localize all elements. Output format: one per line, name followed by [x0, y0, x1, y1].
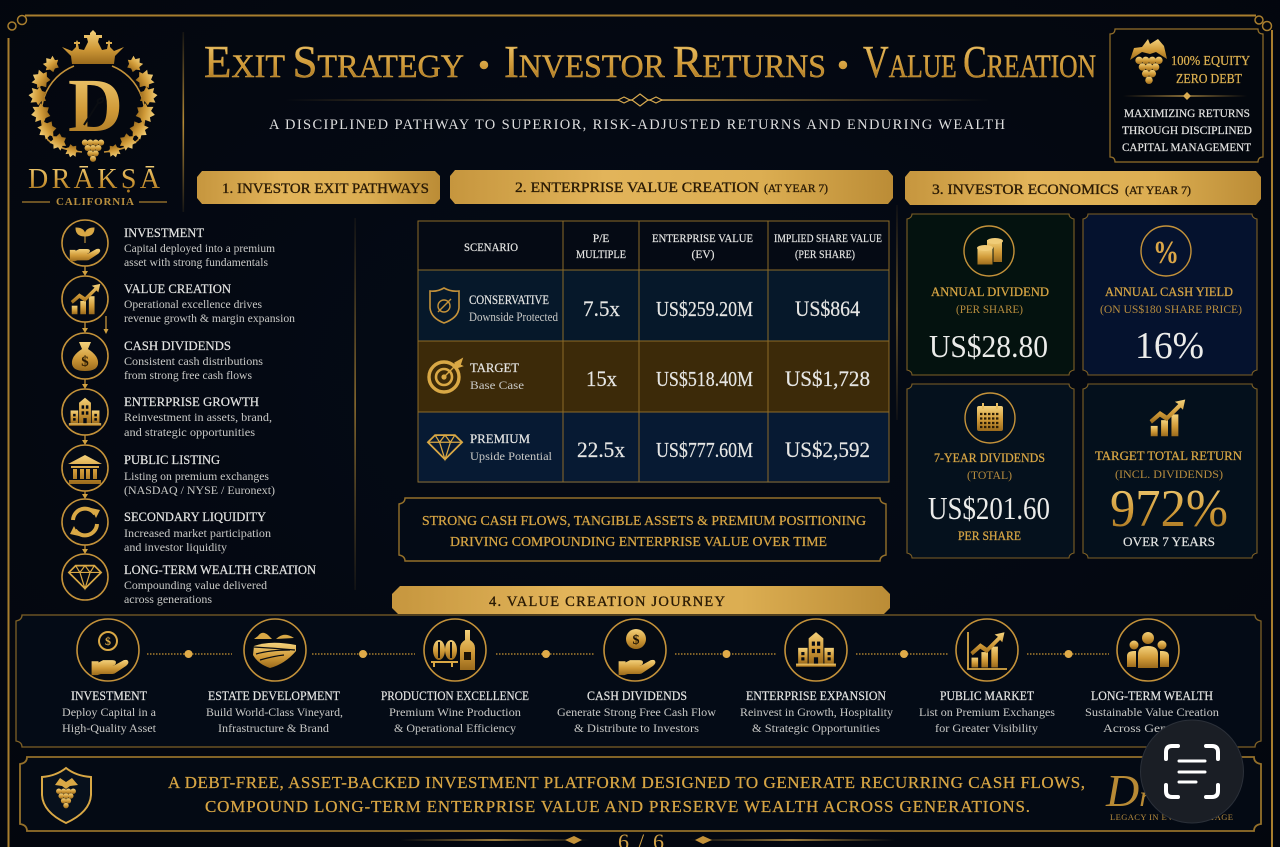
- pathway: secondary liquidity: SECONDARY LIQUIDITY: [124, 509, 267, 524]
- title: VALUE CREATION: [863, 36, 1096, 87]
- panel: annual dividend: ANNUAL DIVIDEND: [931, 284, 1049, 299]
- section banner 1: 1. INVESTOR EXIT PATHWAYS: [222, 181, 429, 197]
- callout: strong cash flows: DRIVING COMPOUNDING ENTERPRISE VALUE OVER TIME: [450, 534, 827, 549]
- pathway: public listing: (NASDAQ / NYSE / Euronext): [124, 485, 275, 497]
- step: cash dividends: CASH DIVIDENDS: [587, 688, 687, 703]
- step: long-term wealth: Sustainable Value Creation: [1085, 705, 1219, 719]
- step: enterprise expansion: [740, 619, 893, 735]
- pathway: enterprise growth: ENTERPRISE GROWTH: [124, 394, 259, 409]
- row: target: TARGET: [470, 361, 519, 375]
- pathway: cash dividends: from strong free cash flows: [124, 370, 253, 382]
- section banner 2: [450, 170, 893, 204]
- panel: target total return: TARGET TOTAL RETURN: [1095, 448, 1243, 463]
- section banner 3: [905, 171, 1261, 205]
- title: EXIT STRATEGY: [204, 36, 464, 87]
- pathway: long-term wealth creation: Compounding value delivered: [124, 580, 267, 592]
- section banner 2: (AT YEAR 7): [764, 181, 828, 195]
- panel: target total return: OVER 7 YEARS: [1123, 535, 1215, 549]
- table header: (EV): [692, 249, 715, 261]
- panel: 7-year dividends: [907, 384, 1074, 558]
- step: production excellence: Premium Wine Production: [389, 705, 521, 719]
- table header: SCENARIO: [464, 242, 518, 254]
- row: conservative: Downside Protected: [469, 310, 559, 324]
- pathway: public listing: PUBLIC LISTING: [124, 452, 220, 467]
- icon: calendar: [965, 393, 1015, 443]
- scan button overlay: [1140, 720, 1244, 823]
- step: long-term wealth: [1085, 619, 1219, 735]
- panel: annual dividend: (PER SHARE): [956, 302, 1023, 316]
- panel: annual dividend: [907, 214, 1074, 375]
- callout: strong cash flows: STRONG CASH FLOWS, TANGIBLE ASSETS & PREMIUM POSITIONING: [422, 513, 866, 528]
- panel: closing statement: [20, 757, 1261, 831]
- pathway: value creation: Operational excellence drives: [124, 299, 263, 311]
- row: conservative: US$259.20M: [656, 297, 753, 321]
- pathway: long-term wealth creation: [62, 554, 317, 606]
- row: premium: US$2,592: [785, 437, 870, 462]
- row: premium: US$777.60M: [656, 438, 753, 462]
- panel: value creation journey: [16, 615, 1261, 747]
- pathway: cash dividends: Consistent cash distributions: [124, 356, 264, 368]
- panel: enterprise value table: [418, 221, 889, 483]
- step: investment: $: [105, 634, 111, 648]
- row: conservative: CONSERVATIVE: [469, 293, 549, 307]
- statement text: A DEBT-FREE, ASSET-BACKED INVESTMENT PLATFORM DESIGNED TO GENERATE RECURRING CASH FLOWS,: [168, 773, 1085, 792]
- icon: scan brackets: [1166, 746, 1218, 797]
- monogram letter D: D: [68, 64, 123, 148]
- step: investment: High-Quality Asset: [62, 721, 157, 735]
- row: premium: Upside Potential: [470, 449, 553, 463]
- pathway: value creation: VALUE CREATION: [124, 281, 232, 296]
- row: premium: [428, 432, 870, 463]
- pathway: investment: asset with strong fundamentals: [124, 257, 269, 269]
- badge headline: 100% EQUITY: [1171, 54, 1250, 69]
- panel: annual cash yield: [1083, 214, 1257, 375]
- step: cash dividends: & Distribute to Investors: [574, 721, 699, 735]
- step: cash dividends: $: [632, 633, 640, 648]
- pathway: public listing: Listing on premium exchanges: [124, 471, 270, 483]
- pathway: long-term wealth creation: LONG-TERM WEALTH CREATION: [124, 562, 317, 577]
- row: target: Base Case: [470, 378, 524, 392]
- pathway: long-term wealth creation: across generations: [124, 594, 213, 606]
- brand name: DRĀKṢĀ: [28, 164, 161, 195]
- step: production excellence: & Operational Efficiency: [394, 721, 516, 735]
- panel: 7-year dividends: US$201.60: [928, 490, 1050, 526]
- row: target: US$518.40M: [656, 367, 753, 391]
- panel: annual cash yield: 16%: [1135, 325, 1204, 367]
- pathway: cash dividends: [62, 333, 264, 382]
- table header: P/E: [593, 233, 609, 245]
- step: investment: [62, 619, 157, 735]
- row: conservative: 7.5x: [583, 296, 620, 321]
- step: estate development: ESTATE DEVELOPMENT: [208, 688, 340, 703]
- badge: 100% equity zero debt: THROUGH DISCIPLINED: [1122, 123, 1252, 137]
- pathway: investment: [62, 220, 275, 269]
- panel: target total return: 972%: [1110, 480, 1228, 538]
- pathway: value creation: revenue growth & margin expansion: [124, 313, 295, 325]
- title: INVESTOR RETURNS: [504, 36, 826, 87]
- badge: 100% equity zero debt: CAPITAL MANAGEMENT: [1122, 140, 1252, 154]
- panel: annual dividend: US$28.80: [929, 328, 1048, 364]
- icon: crown: [62, 30, 124, 64]
- row: conservative: US$864: [795, 296, 860, 321]
- step: estate development: Build World-Class Vineyard,: [206, 705, 343, 719]
- step: investment: INVESTMENT: [71, 688, 147, 703]
- step: enterprise expansion: & Strategic Opportunities: [752, 721, 880, 735]
- icon: wreath: [28, 53, 158, 159]
- table header: (PER SHARE): [795, 249, 855, 261]
- pathway: cash dividends: CASH DIVIDENDS: [124, 338, 231, 353]
- panel: target total return: (INCL. DIVIDENDS): [1115, 467, 1223, 481]
- title ornament: [285, 94, 990, 106]
- section banner 4: 4. VALUE CREATION JOURNEY: [489, 594, 726, 610]
- step: cash dividends: Generate Strong Free Cash Flow: [557, 705, 716, 719]
- logo: Draksa California: [22, 30, 167, 208]
- pathway: cash dividends: $: [81, 354, 89, 370]
- step: public market: for Greater Visibility: [935, 721, 1038, 735]
- table header: IMPLIED SHARE VALUE: [774, 233, 882, 245]
- step: estate development: Infrastructure & Brand: [218, 721, 329, 735]
- panel: annual cash yield: ANNUAL CASH YIELD: [1105, 284, 1233, 299]
- panel: investor exit pathways: [62, 220, 317, 606]
- badge text: MAXIMIZING RETURNS: [1124, 106, 1250, 120]
- icon: grape cluster: [82, 140, 104, 162]
- panel: 7-year dividends: (TOTAL): [967, 468, 1012, 482]
- row: target: 15x: [586, 366, 617, 391]
- row: conservative: [430, 288, 860, 324]
- icon: grape with leaf: [1130, 39, 1167, 84]
- icon: growth chart: [1150, 399, 1185, 436]
- icon: percent: %: [1153, 235, 1179, 271]
- row: premium: PREMIUM: [470, 432, 530, 446]
- callout: strong cash flows: [399, 498, 886, 561]
- section banner 4: [392, 586, 890, 614]
- step: production excellence: [381, 619, 529, 735]
- row: premium: 22.5x: [577, 437, 625, 462]
- step: public market: PUBLIC MARKET: [940, 688, 1034, 703]
- pathway: enterprise growth: and strategic opportunities: [124, 427, 256, 439]
- pathway: secondary liquidity: [62, 499, 271, 554]
- step: cash dividends: [557, 619, 716, 735]
- panel: 7-year dividends: PER SHARE: [958, 529, 1021, 543]
- row: target: US$1,728: [785, 366, 870, 391]
- panel: closing statement: COMPOUND LONG-TERM ENTERPRISE VALUE AND PRESERVE WEALTH ACROSS GENERATIONS.: [205, 797, 1030, 816]
- icon: percent: [1141, 226, 1191, 276]
- section banner 3: (AT YEAR 7): [1125, 183, 1191, 197]
- panel: target total return: [1083, 384, 1257, 558]
- title: •: [478, 47, 490, 84]
- pathway: investment: INVESTMENT: [124, 225, 204, 240]
- panel: 7-year dividends: 7-YEAR DIVIDENDS: [934, 450, 1045, 465]
- step: long-term wealth: LONG-TERM WEALTH: [1091, 688, 1213, 703]
- connector arrows: [82, 266, 108, 554]
- journey connectors: [147, 650, 1109, 658]
- pathway: value creation: [62, 276, 295, 325]
- title: •: [837, 47, 849, 84]
- step: enterprise expansion: Reinvest in Growth, Hospitality: [740, 705, 893, 719]
- tagline: LEGACY IN EVERY VINTAGE: [1110, 812, 1233, 822]
- pathway: secondary liquidity: Increased market participation: [124, 528, 271, 540]
- section banner 1: [197, 171, 440, 204]
- step: public market: List on Premium Exchanges: [919, 705, 1055, 719]
- step: long-term wealth: Across Generations: [1103, 721, 1210, 735]
- pathway: secondary liquidity: and investor liquidity: [124, 542, 227, 554]
- signature: Drākṣā: [1105, 765, 1206, 816]
- badge: 100% equity zero debt: [1110, 29, 1263, 162]
- section banner 2: 2. ENTERPRISE VALUE CREATION: [515, 180, 759, 196]
- step: enterprise expansion: ENTERPRISE EXPANSION: [746, 688, 887, 703]
- page number: [400, 829, 895, 847]
- badge: 100% equity zero debt: ZERO DEBT: [1176, 72, 1242, 87]
- pathway: investment: Capital deployed into a premium: [124, 243, 275, 255]
- pathway: public listing: [62, 445, 275, 497]
- icon: shield with grapes: [42, 768, 91, 823]
- table header: MULTIPLE: [576, 249, 626, 261]
- section banner 3: 3. INVESTOR ECONOMICS: [932, 182, 1119, 198]
- step: estate development: [206, 619, 343, 735]
- pathway: enterprise growth: Reinvestment in assets, brand,: [124, 412, 272, 424]
- table header: ENTERPRISE VALUE: [652, 233, 753, 245]
- table header: [464, 233, 882, 261]
- subtitle: A DISCIPLINED PATHWAY TO SUPERIOR, RISK-ADJUSTED RETURNS AND ENDURING WEALTH: [269, 117, 1006, 133]
- step: production excellence: PRODUCTION EXCELLENCE: [381, 688, 529, 703]
- brand location: CALIFORNIA: [56, 196, 134, 208]
- step: investment: Deploy Capital in a: [62, 705, 157, 719]
- pathway: enterprise growth: [62, 389, 272, 439]
- icon: coins: [964, 226, 1014, 276]
- title: [204, 36, 1096, 87]
- row: target: [429, 359, 870, 392]
- icon: compass needle: [84, 98, 103, 125]
- panel: annual cash yield: (ON US$180 SHARE PRICE): [1100, 302, 1242, 316]
- step: public market: [919, 619, 1055, 735]
